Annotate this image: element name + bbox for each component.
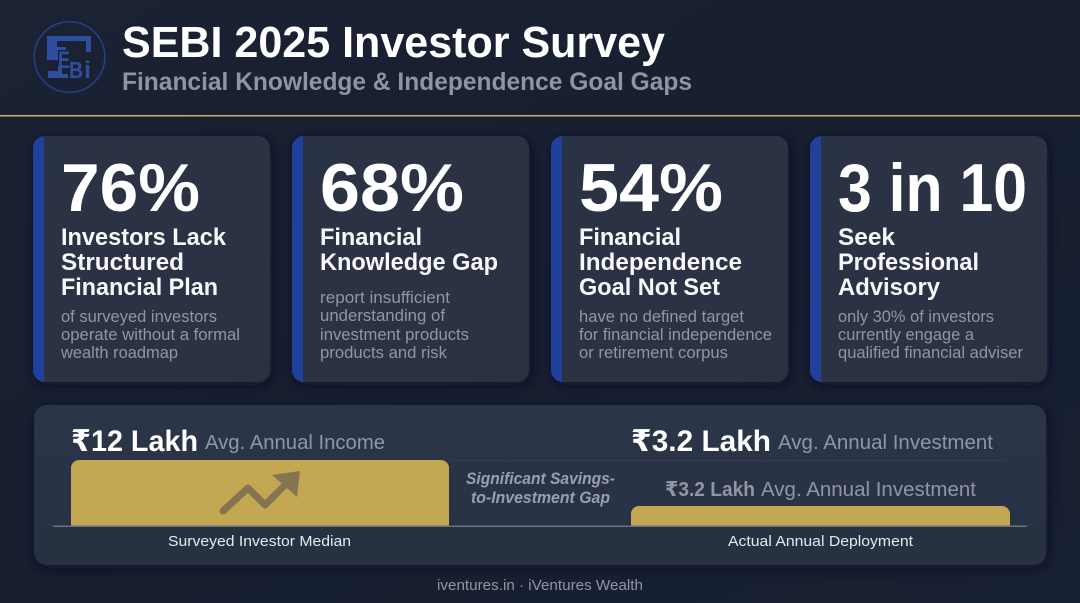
bar: income (71, 460, 449, 526)
panel: 54% stat card: or retirement corpus (579, 344, 728, 362)
gap callout: to-Investment Gap (471, 489, 610, 507)
panel: 76% stat card: wealth roadmap (60, 344, 178, 362)
investment label: Avg. Annual Investment (778, 431, 993, 454)
panel: 54% stat card: have no defined target (579, 308, 744, 326)
panel: 68% stat card: products and risk (320, 344, 448, 362)
panel: 3 in 10 stat card (810, 136, 1047, 382)
panel: 3 in 10 stat card: currently engage a (838, 326, 975, 344)
panel: 54% stat card: Goal Not Set (579, 274, 720, 301)
panel: 54% stat card: Independence (579, 249, 742, 276)
gap callout: Significant Savings- (466, 470, 615, 488)
panel: 68% stat card: understanding of (320, 307, 445, 325)
panel: 76% stat card (33, 136, 270, 382)
income label: Avg. Annual Income (205, 431, 385, 454)
panel: 54% stat card (551, 136, 788, 382)
icon: SEBI logo (34, 22, 105, 92)
bar value label: ₹3.2 Lakh (665, 478, 755, 501)
bar: investment (631, 506, 1010, 526)
panel: 3 in 10 stat card: 3 in 10 (838, 150, 1027, 226)
panel: 76% stat card: Investors Lack (61, 224, 227, 251)
panel: 3 in 10 stat card: only 30% of investors (838, 308, 994, 326)
panel: 54% stat card: for financial independence (579, 326, 772, 344)
icon: SEBI logo: B (69, 57, 83, 83)
panel: 68% stat card: Knowledge Gap (320, 249, 498, 276)
bar value label: Avg. Annual Investment (761, 478, 976, 501)
gap callout (466, 470, 615, 507)
panel: 54% stat card: 54% (579, 150, 723, 226)
icon: SEBI logo: E (58, 47, 70, 74)
footer: iventures.in · iVentures Wealth (437, 578, 643, 594)
title: SEBI 2025 Investor Survey (122, 18, 666, 67)
bar value label (665, 478, 976, 501)
panel: income vs investment chart (34, 405, 1046, 565)
income label (71, 425, 385, 458)
investment label (631, 425, 993, 458)
panel: 68% stat card (292, 136, 529, 382)
header (34, 18, 692, 96)
panel: 76% stat card: operate without a formal (61, 326, 240, 344)
investment label: ₹3.2 Lakh (631, 425, 771, 458)
panel: 76% stat card: Financial Plan (61, 274, 218, 301)
subtitle: Financial Knowledge & Independence Goal Gaps (122, 68, 692, 96)
panel: 3 in 10 stat card: Professional (838, 249, 979, 276)
income label: ₹12 Lakh (71, 425, 198, 458)
panel: 3 in 10 stat card: Seek (838, 224, 896, 251)
panel: 68% stat card: investment products (320, 326, 469, 344)
icon: trend arrow (223, 471, 300, 511)
panel: 68% stat card: report insufficient (320, 289, 450, 307)
panel: 68% stat card: 68% (320, 150, 464, 226)
panel: 76% stat card: of surveyed investors (61, 308, 217, 326)
panel: 76% stat card: 76% (61, 150, 200, 226)
panel: 3 in 10 stat card: qualified financial adviser (838, 344, 1023, 362)
axis label: left: Surveyed Investor Median (168, 533, 351, 550)
panel: 3 in 10 stat card: Advisory (838, 274, 941, 301)
axis label: right: Actual Annual Deployment (728, 533, 914, 550)
panel: 54% stat card: Financial (579, 224, 681, 251)
panel: 76% stat card: Structured (61, 249, 184, 276)
icon: SEBI logo: i (84, 57, 91, 84)
panel: 68% stat card: Financial (320, 224, 422, 251)
